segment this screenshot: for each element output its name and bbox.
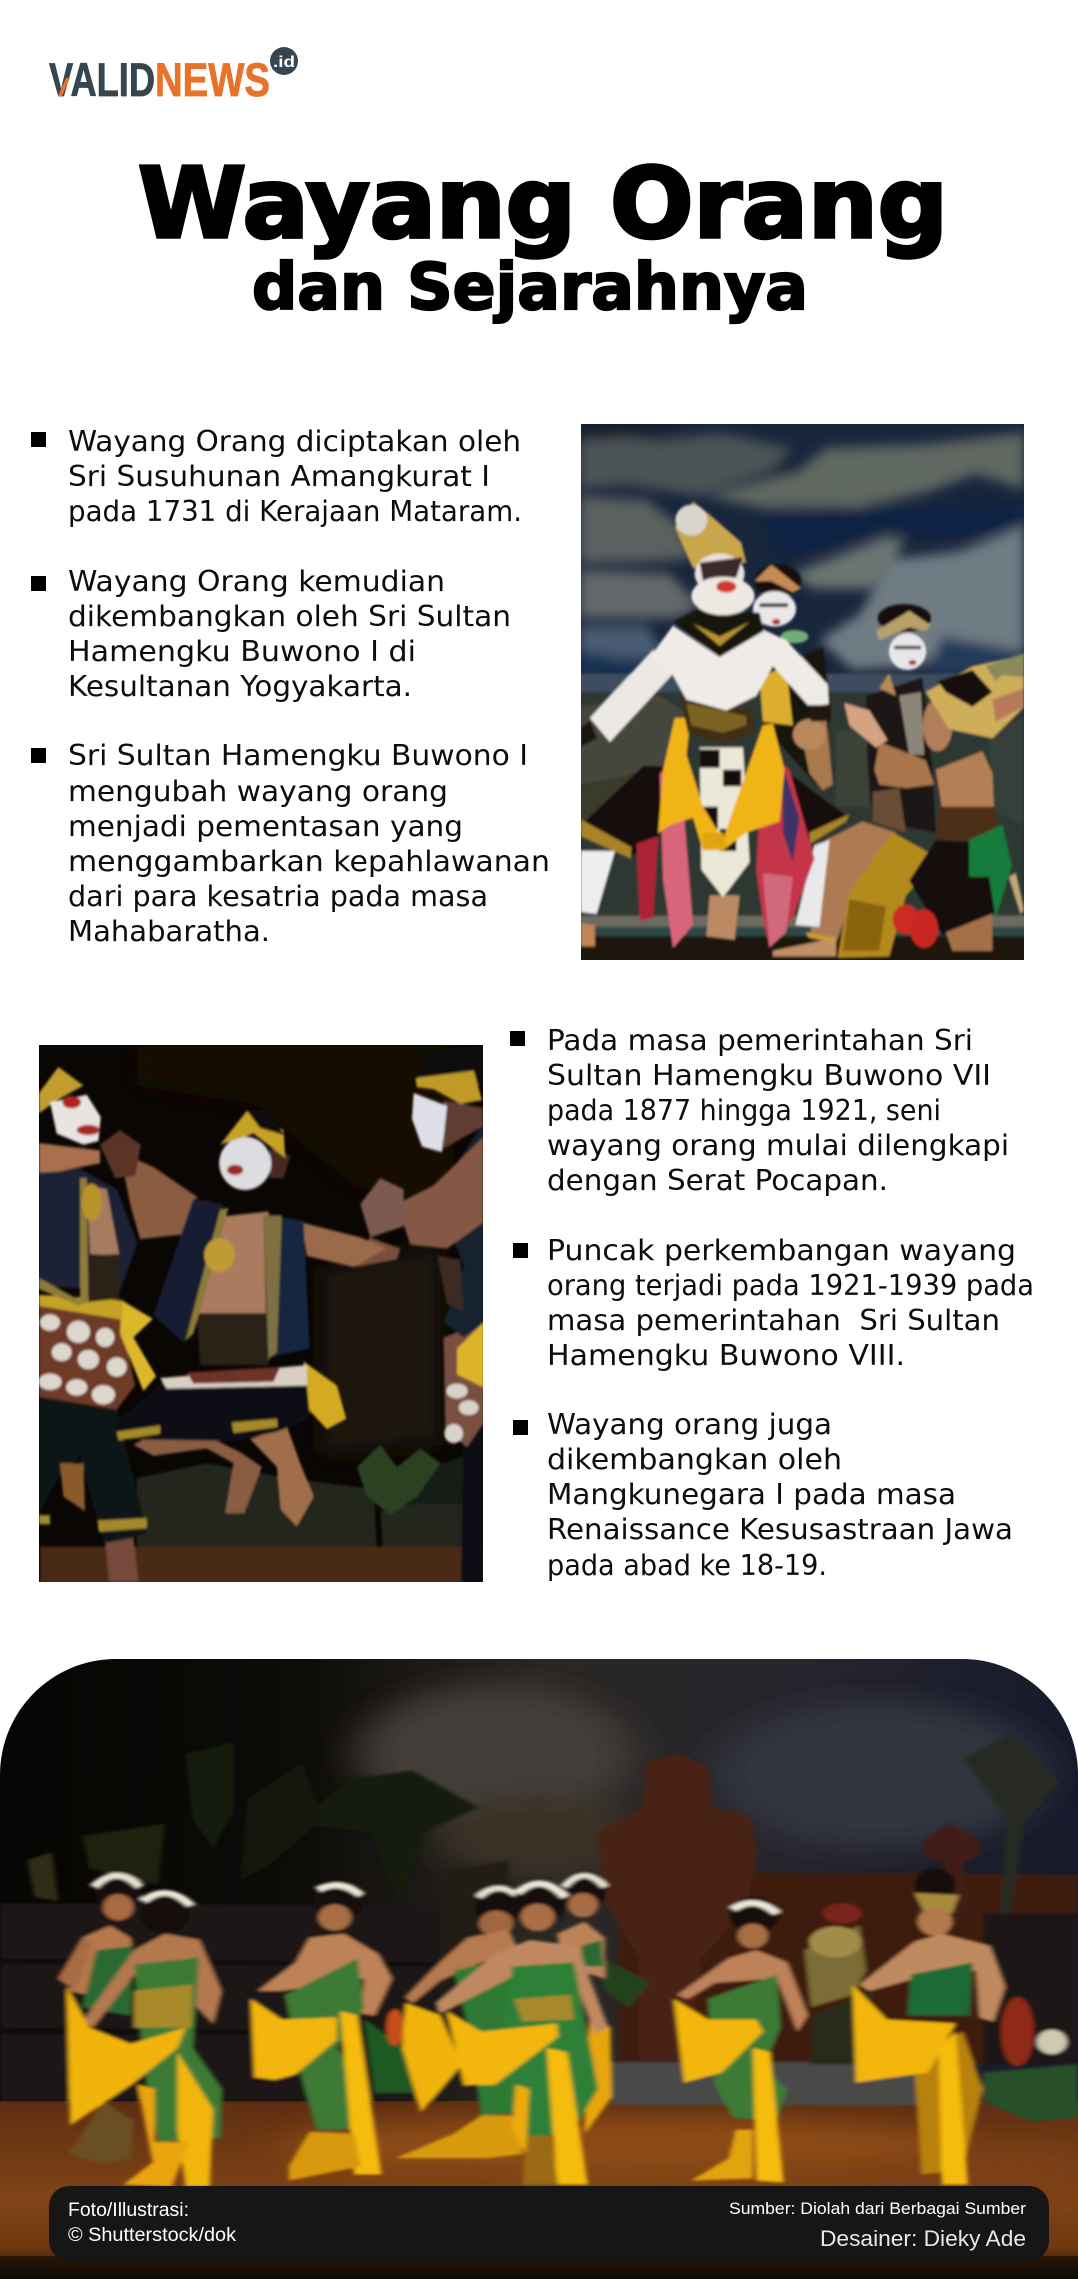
bullet 5: orang terjadi pada 1921-1939 pada: [547, 1269, 1034, 1302]
bullet 4: dengan Serat Pocapan.: [547, 1164, 888, 1197]
logo: Validnews.id: [49, 47, 298, 106]
photo: female dancers in green with yellow sashes on stage: [0, 1640, 1078, 2279]
bullet 3: Mahabaratha.: [68, 915, 270, 948]
bullet 6: Renaissance Kesusastraan Jawa: [547, 1513, 1013, 1546]
logo badge .id: [270, 47, 298, 75]
photo: wayang orang children performers in front of cloud backdrop: [580, 422, 1026, 962]
bullet 3: mengubah wayang orang: [68, 775, 448, 808]
dancer E front center: [437, 1879, 608, 2185]
stage backdrop lower: [580, 674, 1024, 692]
bullet 5: masa pemerintahan Sri Sultan: [547, 1304, 1000, 1337]
title line 2: dan Sejarahnya: [252, 251, 808, 325]
right performer: [347, 1045, 484, 1584]
credit: photo: © Shutterstock/dok: [68, 2225, 237, 2246]
bullet 1: [31, 425, 522, 528]
bullet 6: [513, 1408, 1013, 1582]
bullet 2: dikembangkan oleh Sri Sultan: [68, 600, 511, 633]
center dancer: [100, 1110, 387, 1526]
bottom darkening: [0, 2256, 1078, 2279]
text block: upper left bullets: [31, 425, 550, 948]
credit: designer: Desainer: Dieky Ade: [820, 2226, 1026, 2251]
bullet 4: Pada masa pemerintahan Sri: [547, 1024, 973, 1057]
bullet 4: wayang orang mulai dilengkapi: [547, 1129, 1009, 1162]
dancer F back center right: [557, 1871, 612, 2134]
dancer C: [251, 1881, 392, 2181]
bullet 4: pada 1877 hingga 1921, seni: [547, 1094, 941, 1127]
logo wordmark NEWS: NEWS: [155, 53, 270, 106]
bullet 1: pada 1731 di Kerajaan Mataram.: [68, 495, 522, 528]
dancer H right with crown: [853, 1868, 1005, 2185]
hanoman main figure: [581, 502, 849, 948]
bullet 6: dikembangkan oleh: [547, 1443, 842, 1476]
logo badge .id: .id: [273, 54, 295, 71]
bullet 2: Hamengku Buwono I di: [68, 635, 416, 668]
bullet 2: Wayang Orang kemudian: [68, 565, 445, 598]
bullet 6: Mangkunegara I pada masa: [547, 1478, 956, 1511]
photo: masked wayang dancer leaping between two performers: [37, 1041, 485, 1585]
credit: photo: Foto/Illustrasi:: [68, 2200, 189, 2221]
third child standing: [866, 604, 936, 833]
logo wordmark VALID: VALID: [49, 53, 155, 106]
bullet 4: Sultan Hamengku Buwono VII: [547, 1059, 991, 1092]
bullet 3: [31, 739, 550, 948]
logo orange accent on V: [58, 78, 70, 96]
left performer: [38, 1067, 156, 1582]
dancer B: [67, 1893, 221, 2187]
title: [138, 147, 948, 325]
bullet 3: menjadi pementasan yang: [68, 810, 463, 843]
bullet 6: pada abad ke 18-19.: [547, 1549, 827, 1582]
floor and rocks: [137, 1463, 377, 1556]
bullet 2: Kesultanan Yogyakarta.: [68, 670, 412, 703]
title line 1: Wayang Orang: [138, 147, 948, 260]
bullet 5: Puncak perkembangan wayang: [547, 1234, 1016, 1267]
bullet 4: [510, 1024, 1009, 1197]
bullet 5: Hamengku Buwono VIII.: [547, 1339, 905, 1372]
flowers and plants: [804, 1926, 866, 2007]
footer credit bar: [49, 2186, 1049, 2261]
bullet 6: Wayang orang juga: [547, 1408, 832, 1441]
kneeling child: [773, 653, 1024, 958]
dancer D back center: [395, 1888, 523, 2158]
bullet 3: menggambarkan kepahlawanan: [68, 845, 550, 878]
back child figure: [753, 565, 833, 790]
scenery: [0, 1903, 447, 2101]
dancer A back left: [58, 1874, 142, 2164]
credit: photo: [68, 2200, 237, 2246]
bullet 1: Wayang Orang diciptakan oleh: [68, 425, 521, 458]
bullet 3: dari para kesatria pada masa: [68, 880, 488, 913]
bullet 5: [513, 1234, 1034, 1372]
bullet 3: Sri Sultan Hamengku Buwono I: [68, 739, 528, 772]
dancer G: [674, 1897, 808, 2183]
bullet 2: [31, 565, 511, 703]
credit: source: Sumber: Diolah dari Berbagai Sumber: [729, 2199, 1026, 2218]
bullet 1: Sri Susuhunan Amangkurat I: [68, 460, 490, 493]
text block: right column bullets: [510, 1024, 1034, 1582]
